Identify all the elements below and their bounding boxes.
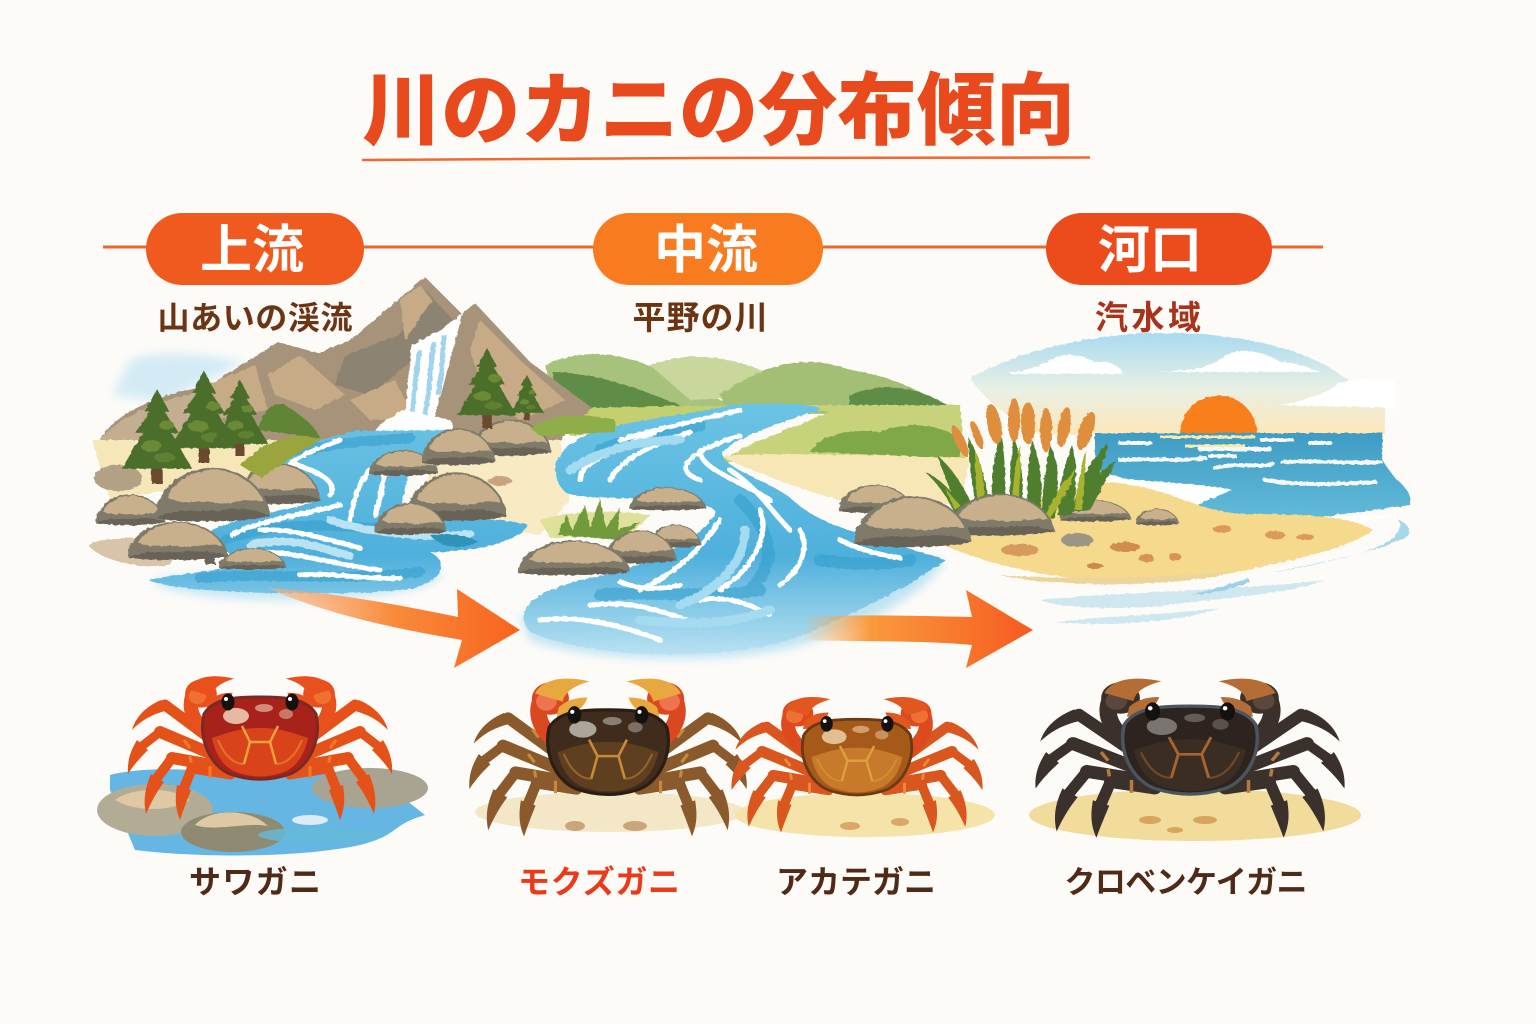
- stage pill: midstream: [593, 213, 823, 285]
- stage pill: estuary: [1046, 213, 1272, 285]
- title: 川のカニの分布傾向: [362, 66, 1075, 155]
- habitat subtitles: 汽水域: [1095, 299, 1201, 336]
- upstream river: [148, 430, 528, 593]
- crab: サワガニ: [97, 676, 428, 900]
- species label: アカテガニ: [776, 864, 936, 900]
- rocks: [94, 420, 1179, 575]
- crab figure: [731, 697, 983, 832]
- habitat subtitles: 山あいの渓流: [158, 300, 352, 336]
- habitat subtitles: [158, 299, 1201, 336]
- pale water washes: [112, 354, 945, 658]
- flow arrow: upstream to midstream: [268, 588, 520, 668]
- river landscape illustration: [88, 277, 1411, 654]
- crab: クロベンケイガニ: [1029, 679, 1361, 900]
- reeds: [925, 398, 1117, 518]
- habitat: yellow sand: [735, 793, 995, 837]
- sun: [1180, 396, 1257, 434]
- sand banks: [88, 440, 570, 566]
- habitat: mudflat sand: [1029, 789, 1361, 841]
- crab figure: [469, 679, 747, 836]
- mountains: [100, 277, 592, 452]
- meadows: [560, 405, 970, 505]
- river stage timeline: [103, 213, 1323, 285]
- stage pill: estuary: 河口: [1098, 222, 1202, 280]
- species label: サワガニ: [189, 864, 321, 900]
- midstream river: [523, 404, 945, 654]
- stage pill: midstream: 中流: [654, 222, 758, 280]
- tidal ripples: [1040, 520, 1409, 624]
- species label: モクズガニ: [518, 864, 680, 900]
- island grass: [540, 498, 650, 540]
- crab figure: [128, 676, 392, 820]
- estuary rocks: [854, 494, 1055, 547]
- habitat: sandy ground: [475, 792, 745, 832]
- habitat: stream and rocks: [97, 768, 428, 855]
- stage pill: upstream: [146, 213, 364, 285]
- crab figure: [1035, 679, 1345, 838]
- flow arrow: midstream to estuary: [805, 590, 1033, 668]
- estuary sky: [970, 333, 1395, 434]
- habitat subtitles: 平野の川: [632, 299, 768, 336]
- distant hills: [545, 354, 955, 415]
- species label: クロベンケイガニ: [1064, 865, 1308, 900]
- pine trees: [122, 348, 615, 484]
- crab: モクズガニ: [469, 679, 747, 900]
- estuary beach: [945, 482, 1373, 584]
- stage pill: upstream: 上流: [200, 222, 304, 280]
- sea: [1095, 433, 1411, 527]
- waterfall: [372, 313, 463, 438]
- crab: アカテガニ: [731, 697, 995, 900]
